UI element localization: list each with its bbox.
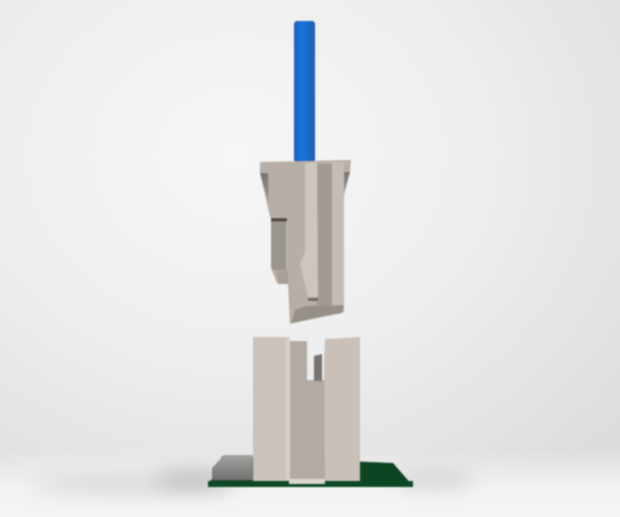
left wedge — [260, 173, 269, 205]
slot inner wall — [314, 354, 322, 381]
end recess — [291, 305, 344, 323]
right block — [324, 337, 360, 481]
foot — [289, 479, 325, 484]
latch arm — [300, 162, 318, 297]
latch window — [271, 219, 286, 270]
circuit board — [208, 455, 413, 487]
blue wire — [294, 21, 315, 163]
lower connector housing — [253, 337, 360, 484]
centre body — [289, 341, 325, 480]
component block on board — [212, 455, 253, 480]
right rail — [332, 162, 344, 308]
floor — [0, 450, 620, 517]
centre channel shading — [317, 164, 333, 308]
shadow below latch arm — [308, 298, 318, 301]
left block — [253, 337, 289, 481]
floor shadow — [30, 473, 475, 490]
upper connector housing — [260, 160, 351, 324]
right wedge — [342, 172, 350, 196]
